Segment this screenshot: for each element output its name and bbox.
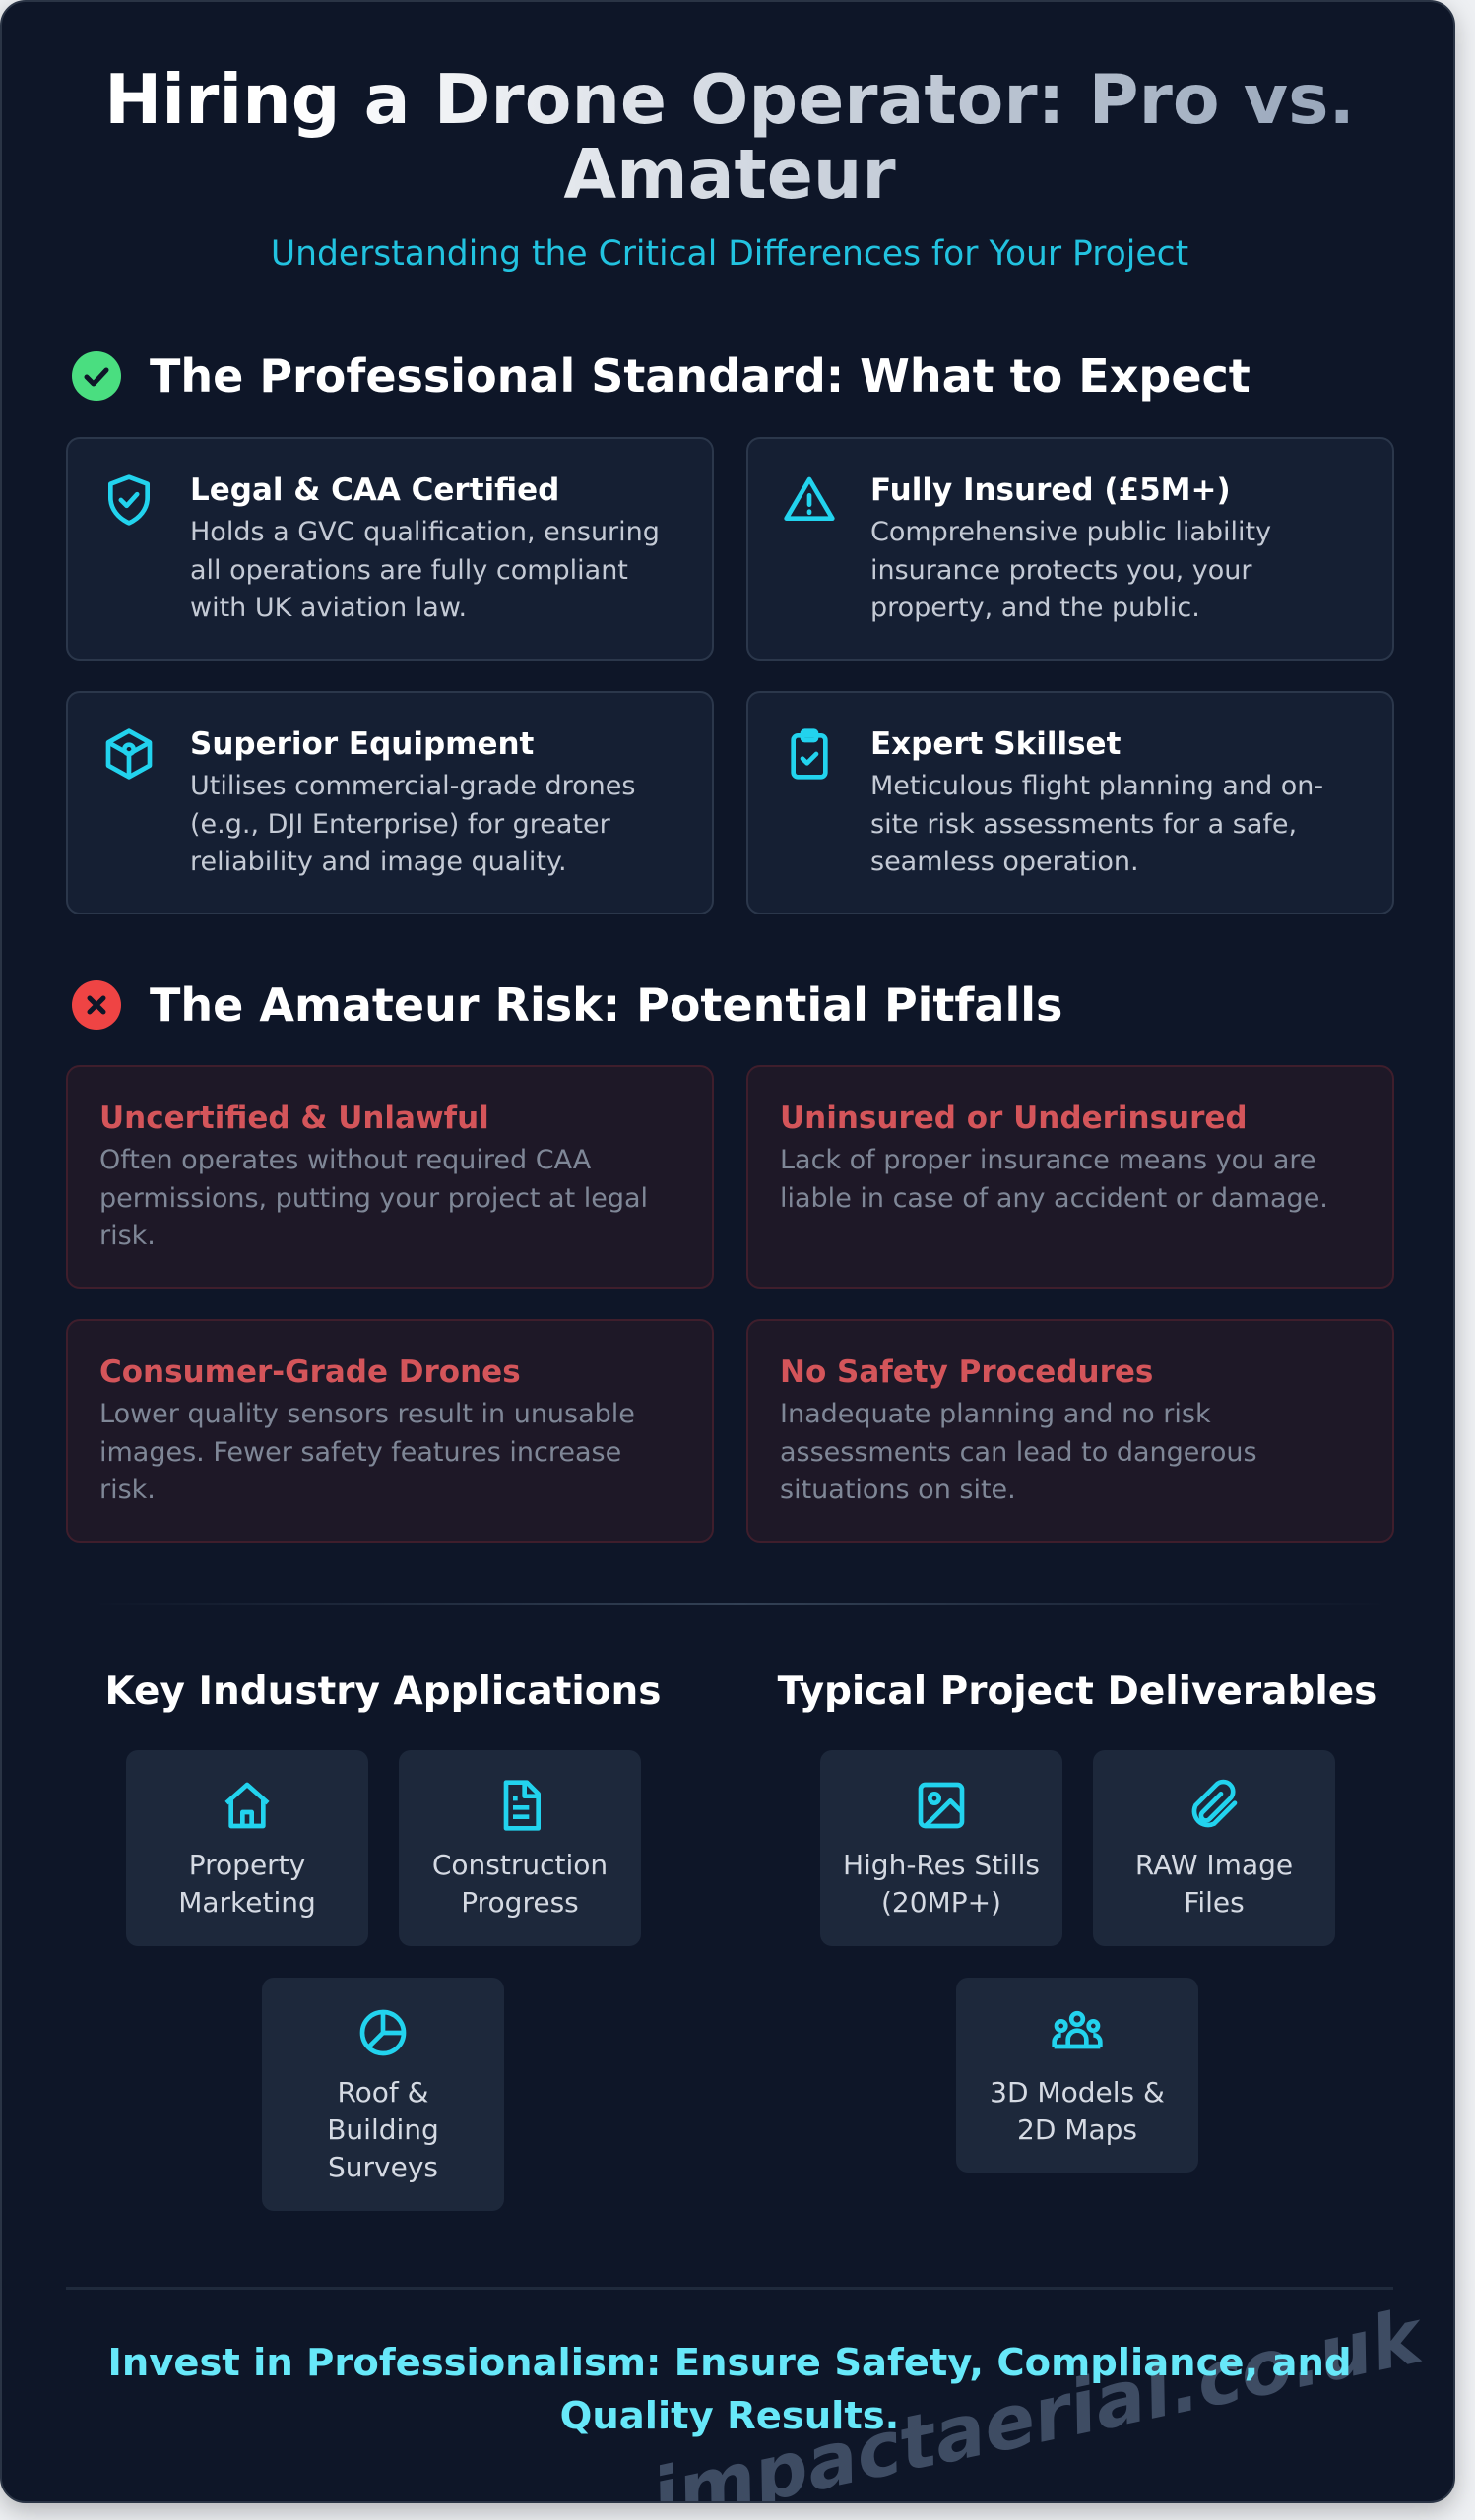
tile: raw: RAW Image: [1135, 1849, 1293, 1881]
panel: consumer drones: Lower quality sensors result in unusable images. Fewer safety features increase: [99, 1399, 635, 1467]
subtitle: Understanding the Critical Differences for Your Project: [271, 234, 1188, 274]
icon: cube: [106, 728, 152, 780]
panel: insured: [746, 437, 1394, 661]
panel: uncertified: [66, 1065, 714, 1289]
title: [2, 63, 1457, 213]
title: Hiring a Drone Operator: Pro vs.: [104, 60, 1355, 140]
icon: warning: [784, 476, 835, 521]
panel: uninsured: Uninsured or Underinsured: [780, 1101, 1248, 1136]
panel: consumer drones: risk.: [99, 1475, 156, 1505]
tile: 3d models: [956, 1978, 1198, 2173]
icon: red x: [72, 980, 121, 1030]
panel: insured: Fully Insured (£5M+): [870, 472, 1231, 508]
panel: uncertified: Uncertified & Unlawful: [99, 1101, 489, 1136]
panel: uninsured: [746, 1065, 1394, 1289]
tile: stills: [820, 1750, 1062, 1946]
panel: consumer drones: [66, 1319, 714, 1543]
tile: 3d models: 3D Models &: [990, 2076, 1165, 2109]
panel: skillset: Meticulous flight planning and on-: [870, 771, 1323, 801]
heading: applications: Key Industry Applications: [104, 1670, 662, 1714]
heading: amateur risk: The Amateur Risk: Potential Pitfalls: [150, 978, 1062, 1032]
footer callout: Quality Results.: [560, 2394, 899, 2438]
panel: skillset: [746, 691, 1394, 914]
tile: construction: Progress: [461, 1886, 579, 1919]
panel: legal: Legal & CAA Certified: [190, 472, 559, 508]
title: Amateur: [563, 135, 896, 215]
tile: roof surveys: [262, 1978, 504, 2211]
heading: professional standard: The Professional Standard: What to Expect: [150, 349, 1251, 403]
tile: construction: Construction: [432, 1849, 608, 1881]
panel: equipment: Superior Equipment: [190, 726, 534, 762]
tile: construction: [399, 1750, 641, 1946]
panel: equipment: Utilises commercial-grade drones (e.g., DJI Enterprise) for greater reliability and image quality.: [190, 771, 635, 877]
tile: roof surveys: Roof &: [337, 2076, 429, 2109]
tile: stills: High-Res Stills: [843, 1849, 1040, 1881]
tile: property: Property: [189, 1849, 305, 1881]
panel: legal: [66, 437, 714, 661]
panel: insured: Comprehensive public liability insurance protects you, your property, and the public.: [870, 517, 1271, 623]
panel: equipment: [66, 691, 714, 914]
panel: uninsured: Lack of proper insurance means you are liable in case of any accident or damage.: [780, 1145, 1328, 1213]
panel: uncertified: Often operates without required CAA permissions, putting your project at legal risk.: [99, 1145, 648, 1251]
tile: stills: (20MP+): [881, 1886, 1001, 1919]
panel: no safety: [746, 1319, 1394, 1543]
footer callout: Invest in Professionalism: Ensure Safety, Compliance, and: [108, 2341, 1351, 2385]
panel: skillset: Expert Skillset: [870, 726, 1121, 762]
panel: no safety: Inadequate planning and no risk assessments can lead to dangerous situations on site.: [780, 1399, 1257, 1505]
tile: roof surveys: Building: [327, 2113, 439, 2146]
tile: property: Marketing: [178, 1886, 316, 1919]
tile: raw: [1093, 1750, 1335, 1946]
panel: legal: Holds a GVC qualification, ensuring all operations are fully compliant with UK aviation law.: [190, 517, 660, 623]
icon: clipboard: [791, 728, 828, 780]
icon: shield: [108, 474, 150, 526]
tile: property: [126, 1750, 368, 1946]
tile: roof surveys: Surveys: [328, 2151, 438, 2183]
icon: green check: [72, 351, 121, 401]
tile: raw: Files: [1184, 1886, 1245, 1919]
panel: no safety: No Safety Procedures: [780, 1354, 1153, 1390]
footer callout: [108, 2341, 1351, 2438]
heading: deliverables: Typical Project Deliverables: [778, 1670, 1377, 1714]
panel: consumer drones: Consumer-Grade Drones: [99, 1354, 521, 1390]
panel: skillset: site risk assessments for a safe, seamless operation.: [870, 809, 1297, 877]
tile: 3d models: 2D Maps: [1017, 2113, 1137, 2146]
